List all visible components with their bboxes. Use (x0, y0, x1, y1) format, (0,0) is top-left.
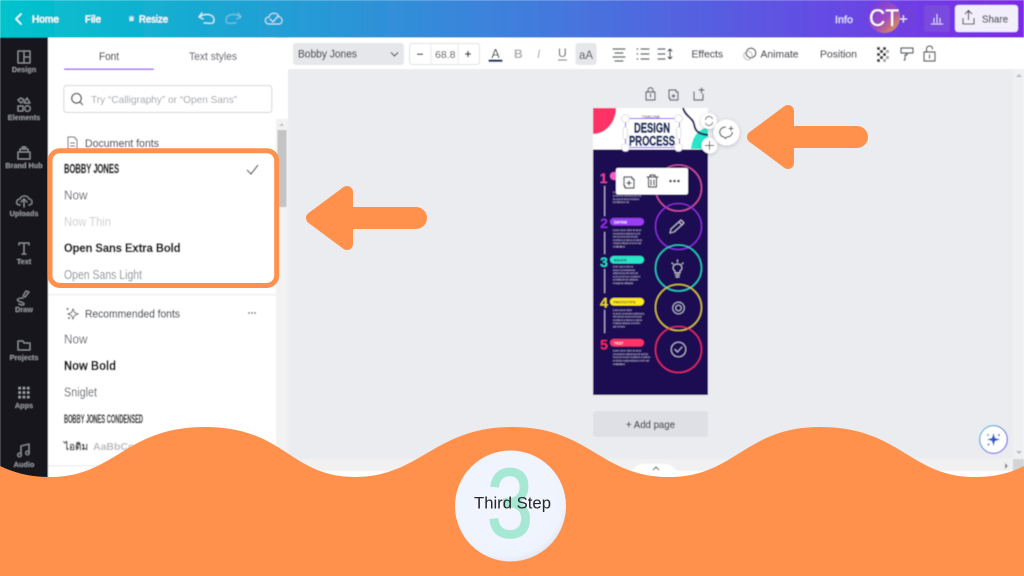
pencil icon (670, 220, 684, 233)
big step number: 3 (487, 448, 533, 558)
step 3: IDEATE (614, 258, 628, 262)
step 3: 3 (600, 254, 608, 270)
pink corner shape (593, 108, 616, 134)
apps item (15, 387, 33, 410)
search box: Try “Calligraphy” or “Open Sans” (91, 94, 237, 106)
comment button (714, 120, 740, 146)
right scrollbar (1013, 69, 1024, 471)
spacing icon (658, 49, 672, 59)
step 4: elit sed do eiusmod tempor (613, 315, 642, 319)
font dropdown (293, 43, 404, 65)
step 3: eiusmod tempor incididunt (613, 274, 640, 278)
step circles (656, 165, 702, 372)
step 3: amet consectetur (613, 268, 635, 272)
page handle tab (628, 464, 680, 472)
lock (924, 46, 935, 61)
step 2: 2 (600, 215, 608, 231)
step 4: sit amet consectetur adipiscing (613, 311, 644, 315)
step 4: PROTOTYPE (614, 300, 636, 304)
design item (12, 51, 36, 74)
position: Position (820, 48, 857, 60)
font: bobby jones: BOBBY JONES (64, 161, 119, 176)
avatar: CT (869, 5, 899, 32)
canvas background (288, 69, 1024, 471)
step 5: consectetur adipiscing elit sed do (613, 352, 649, 356)
step 3: adipiscing elit sed do (613, 271, 639, 275)
text case (576, 43, 596, 65)
elements item: Elements (8, 113, 40, 122)
transparency (877, 47, 889, 62)
underline: U (558, 46, 567, 60)
file label: File (85, 14, 101, 26)
brand hub item (5, 147, 43, 170)
analytics button (924, 5, 950, 32)
timeline label: TIMELINE (642, 114, 661, 119)
document fonts heading: Document fonts (85, 138, 159, 150)
step 5: minim (613, 362, 625, 366)
paint roller (901, 48, 913, 60)
selected check (247, 165, 258, 174)
font: open sans light: Open Sans Light (64, 268, 142, 282)
step 4 (600, 294, 644, 333)
step 2 (600, 215, 644, 254)
brand hub item: Brand Hub (5, 161, 43, 170)
share button (955, 5, 1018, 32)
text item: Text (17, 257, 32, 266)
divider (48, 294, 276, 296)
search box (64, 86, 272, 112)
orange wave footer (0, 427, 1024, 576)
rotate handle (701, 113, 717, 129)
step 5: 5 (600, 336, 608, 352)
step 4: magna aliqua ut enim (613, 321, 640, 325)
bottom scroll strip (288, 459, 1024, 471)
font: now bold: Now Bold (64, 359, 116, 373)
align icon (613, 49, 625, 61)
check icon (671, 342, 686, 357)
bulb icon (672, 260, 683, 277)
font size stepper: 68.8 (435, 49, 456, 61)
text colour (488, 47, 502, 62)
tab: font (64, 51, 154, 70)
info label: Info (835, 14, 853, 26)
step 1: Lorem ipsum dolor sit amet (613, 190, 637, 194)
step 3 (600, 254, 644, 293)
undo icon (199, 13, 214, 23)
step 1: ut labore et (613, 200, 629, 204)
step 3: Lorem ipsum dolor sit (613, 264, 633, 268)
text toolbar (288, 38, 1024, 69)
font: thai sample: AaBbCc (93, 441, 134, 453)
design poster (593, 108, 708, 395)
add page (694, 88, 704, 100)
recommended fonts heading: Recommended fonts (85, 308, 180, 320)
audio item: Audio (14, 460, 35, 469)
audio item (14, 444, 35, 469)
resize label (129, 14, 168, 26)
page controls (646, 88, 704, 100)
step label: Third Step (474, 494, 551, 512)
step 5: eiusmod tempor incididunt ut labore (613, 355, 650, 359)
assistant button (980, 426, 1007, 453)
more dots (248, 312, 256, 314)
effects: Effects (692, 48, 723, 60)
font: now: Now (64, 187, 88, 202)
animate: Animate (760, 48, 799, 60)
step 1: consectetur adipiscing elit sed (613, 194, 641, 198)
duplicate page (669, 90, 678, 100)
draw item: Draw (15, 305, 33, 314)
step 2: incididunt ut labore et dolore (613, 238, 642, 242)
squiggle (683, 108, 708, 135)
duplicate icon (624, 177, 634, 188)
share button: Share (982, 14, 1008, 26)
step 3: magna aliqua (613, 281, 634, 285)
apps item: Apps (15, 401, 33, 410)
add page button: + Add page (626, 419, 675, 431)
top bar (0, 0, 1024, 38)
elements item (8, 98, 40, 122)
lock page (646, 88, 655, 100)
design item: Design (12, 65, 36, 74)
step 2: magna aliqua ut enim ad (613, 241, 642, 245)
trash icon (647, 175, 658, 187)
font: now: Now (64, 332, 88, 346)
projects item: Projects (10, 353, 38, 362)
font size stepper (410, 44, 480, 64)
gear icon (673, 302, 684, 314)
font: sniglet: Sniglet (64, 386, 97, 400)
step 4: 4 (600, 294, 608, 310)
home label: Home (32, 14, 59, 26)
bold: B (514, 47, 523, 61)
floating element toolbar (616, 168, 688, 194)
step 5 (600, 336, 650, 366)
step 1: 1 (600, 170, 608, 186)
cloud saved icon (265, 13, 282, 24)
step 2: DEFINE (614, 220, 628, 224)
step 1: do eiusmod tempor incididunt (613, 197, 639, 201)
avatar: + (899, 11, 908, 28)
uploads item (10, 196, 38, 218)
font dropdown: Bobby Jones (298, 48, 357, 60)
font: open sans extra bold: Open Sans Extra Bold (64, 241, 180, 255)
tab: font: Font (99, 51, 119, 63)
italic: I (537, 47, 541, 61)
text colour: A (491, 47, 500, 61)
step 2: consectetur adipiscing elit (613, 231, 640, 235)
add page button (593, 411, 708, 437)
left navigation rail (0, 38, 48, 478)
step 2: sed do eiusmod tempor (613, 235, 638, 239)
step 5: TEST (614, 342, 624, 346)
font: thai sample (63, 440, 134, 453)
step 4: incididunt ut labore et dolore (613, 318, 642, 322)
list icon (637, 49, 649, 59)
uploads item: Uploads (10, 209, 38, 218)
text item (17, 243, 32, 266)
step 5: Lorem ipsum dolor sit amet (613, 348, 641, 352)
font: now thin: Now Thin (64, 214, 111, 229)
panel scrollbar thumb (278, 130, 286, 207)
text case: aA (579, 50, 593, 62)
animate (744, 48, 799, 60)
font: thai sample: ไอติม (63, 440, 88, 453)
draw item (15, 291, 33, 314)
step badge (455, 448, 566, 562)
tab: text styles: Text styles (189, 51, 237, 63)
arrow: pointing to font list (312, 192, 427, 244)
font panel: BOBBY JONES CONDENSED (64, 414, 143, 426)
step 4: Lorem ipsum dolor (613, 308, 632, 312)
step 2: Lorem ipsum dolor sit amet (613, 228, 641, 232)
teal corner shape (691, 127, 708, 149)
avatar (868, 1, 917, 33)
move handle (702, 138, 718, 154)
arrow: pointing to selected text (753, 111, 868, 163)
step 3: ut labore et dolore (613, 278, 639, 282)
step 4: ad minim (613, 324, 625, 328)
step 1 (600, 170, 644, 216)
selection frame: PROCESS (629, 132, 675, 148)
resize label: Resize (139, 14, 168, 26)
font panel (48, 38, 288, 478)
orange highlight box (50, 151, 277, 286)
more dots (669, 180, 680, 182)
back chevron (16, 14, 21, 24)
step 5: et dolore magna aliqua ut enim ad (613, 358, 649, 362)
step 2: minim (613, 244, 625, 248)
projects item (10, 341, 38, 362)
redo icon (226, 13, 241, 23)
selection frame (622, 114, 682, 152)
selection frame: DESIGN (634, 120, 670, 136)
